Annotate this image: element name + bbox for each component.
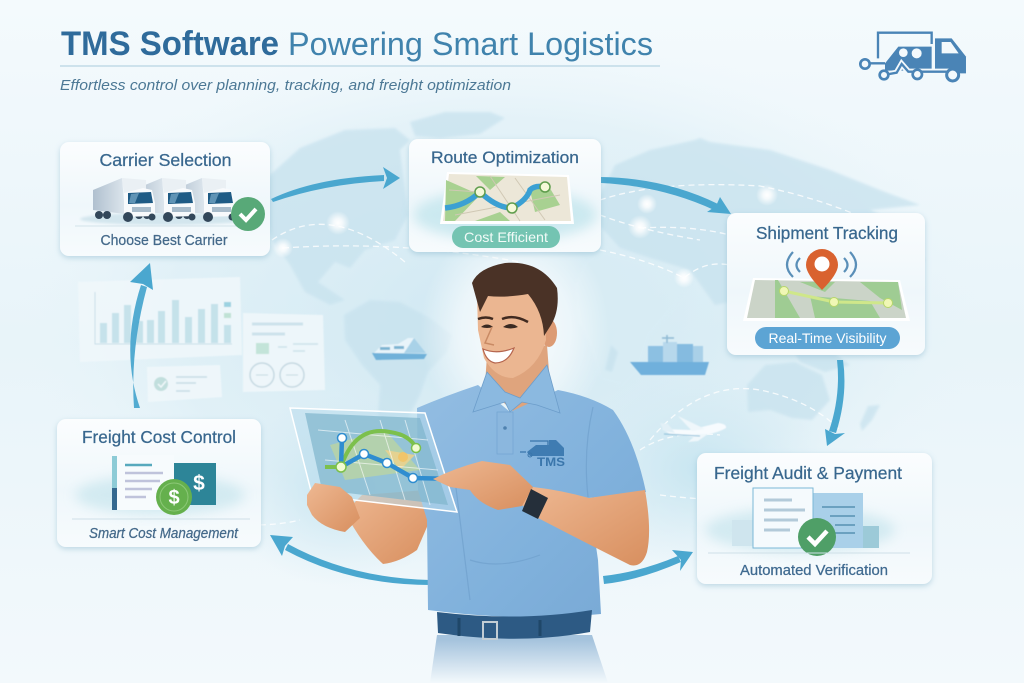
heading: freight audit and payment: Freight Audit & Payment bbox=[714, 463, 902, 483]
icon: truck logo bbox=[860, 33, 966, 81]
panel: route optimization bbox=[409, 139, 601, 252]
icon: invoice, cash and coin bbox=[72, 455, 250, 519]
person with tablet bbox=[290, 263, 649, 683]
placket bbox=[497, 412, 513, 454]
icon: invoice, cash and coin: $ bbox=[168, 487, 180, 509]
icon: ferry bbox=[372, 338, 427, 360]
pants bbox=[430, 635, 608, 683]
pill: real-time visibility: Real-Time Visibility bbox=[768, 330, 886, 346]
panel: carrier selection bbox=[60, 142, 270, 256]
route glow points bbox=[273, 184, 778, 288]
eyes bbox=[481, 324, 518, 328]
map: tracking route bbox=[743, 278, 910, 321]
arrow: cost control to carrier bbox=[130, 263, 153, 408]
shirt logo: TMS bbox=[537, 455, 565, 469]
left arm bbox=[345, 490, 430, 564]
title bbox=[60, 25, 660, 66]
arrow: route to tracking bbox=[601, 177, 731, 214]
icon: audit documents with check bbox=[708, 488, 910, 556]
arrow: carrier to route bbox=[271, 167, 400, 202]
nose bbox=[485, 327, 494, 345]
dashboard panel: status note bbox=[147, 365, 222, 402]
sleeve seam and folds bbox=[455, 407, 593, 600]
shirt logo bbox=[520, 440, 565, 469]
panel: freight cost control bbox=[57, 419, 261, 547]
pill: cost efficient bbox=[452, 226, 560, 248]
icon: invoice, cash and coin: $ bbox=[193, 472, 205, 495]
smile bbox=[483, 348, 514, 363]
panel: freight audit and payment bbox=[697, 453, 932, 584]
polo shirt bbox=[417, 385, 646, 617]
heading: carrier selection: Carrier Selection bbox=[100, 150, 232, 170]
caption: choose best carrier: Choose Best Carrier bbox=[100, 233, 228, 249]
icon: three trucks bbox=[75, 178, 255, 226]
icon: signal waves bbox=[787, 252, 856, 277]
belt bbox=[437, 610, 592, 639]
lower fade bbox=[410, 640, 625, 683]
hair bbox=[472, 263, 558, 336]
face bbox=[477, 290, 546, 378]
dashboard panel: gauges bbox=[243, 313, 325, 392]
neck bbox=[485, 345, 550, 418]
title: TMS Software bbox=[61, 25, 279, 63]
pill: real-time visibility bbox=[755, 327, 900, 349]
collar bbox=[473, 365, 560, 413]
icon: location pin bbox=[806, 249, 838, 290]
pill: cost efficient: Cost Efficient bbox=[464, 229, 548, 245]
icon: container ship bbox=[630, 335, 709, 375]
dashboard panel: bar chart bbox=[78, 277, 242, 362]
wristwatch bbox=[522, 489, 548, 519]
halo behind person bbox=[420, 220, 610, 440]
tablet map bbox=[290, 408, 458, 512]
panel: shipment tracking bbox=[727, 213, 925, 355]
arrow: person to cost control bbox=[270, 535, 430, 585]
arrow: audit bounce from person bbox=[603, 550, 693, 584]
route network bbox=[190, 185, 890, 525]
ear bbox=[541, 319, 557, 347]
icon: green check badge bbox=[231, 197, 265, 231]
title: Powering Smart Logistics bbox=[288, 26, 653, 62]
eyebrows bbox=[478, 317, 528, 322]
heading: shipment tracking: Shipment Tracking bbox=[756, 223, 898, 243]
right arm bbox=[522, 487, 649, 565]
map: optimized route bbox=[440, 172, 574, 224]
holding hand bbox=[307, 483, 360, 532]
pointing hand bbox=[433, 461, 533, 510]
caption: automated verification: Automated Verification bbox=[740, 563, 888, 579]
world map bbox=[262, 112, 925, 440]
subtitle: Effortless control over planning, tracking, and freight optimization bbox=[60, 78, 511, 94]
heading: route optimization: Route Optimization bbox=[431, 148, 579, 167]
icon: airplane bbox=[660, 416, 726, 442]
heading: freight cost control: Freight Cost Control bbox=[82, 427, 236, 447]
caption: smart cost management: Smart Cost Management bbox=[89, 526, 239, 542]
arrow: tracking to audit bbox=[825, 360, 845, 446]
